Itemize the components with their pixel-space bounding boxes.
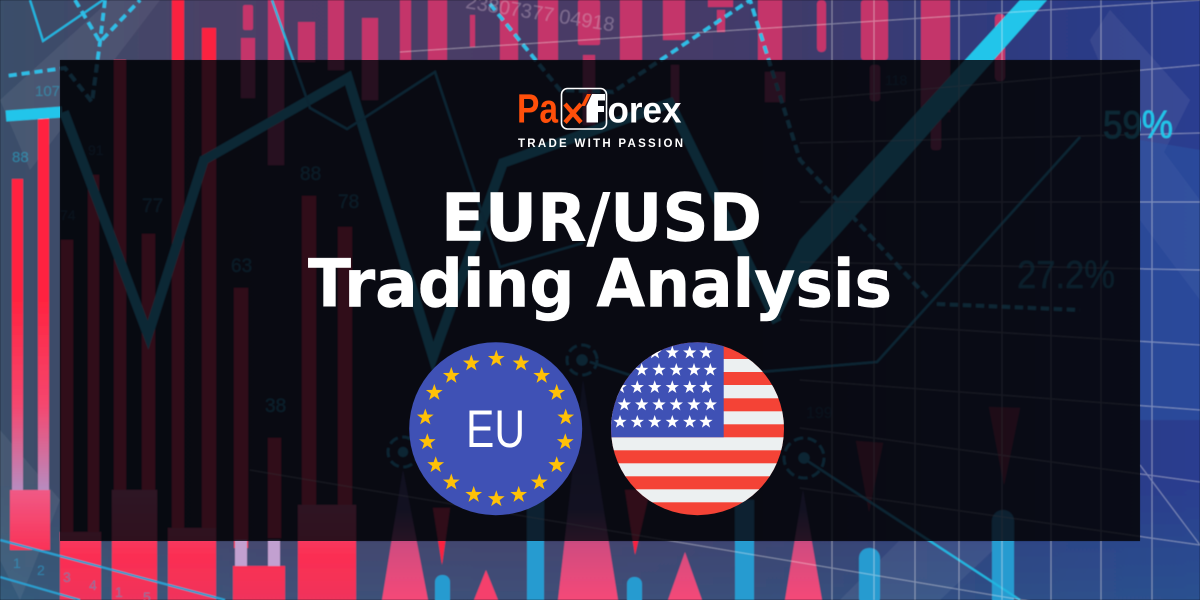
background: trading chart: 4 [89,577,97,593]
chart numbers: 118 [885,72,908,88]
chart numbers: 63 [231,256,252,277]
blue columns [435,500,1014,600]
thick rising line [64,78,777,357]
background: trading chart: 3 [63,569,71,585]
red bars [12,118,49,490]
logo wordmark: orex [608,90,682,130]
chart numbers: 77 [142,196,163,217]
background: trading chart: 1 [115,584,123,600]
logo wordmark [517,86,682,132]
chart numbers: 27.2% [1017,254,1115,297]
grid lines [250,0,1200,600]
chart numbers: 91 [88,142,104,158]
background: trading chart: 2 [37,562,45,578]
chart numbers: 88 [12,149,29,166]
chart numbers: 78 [338,192,359,213]
pink spires [382,380,822,600]
chart numbers: 59% [1103,104,1173,147]
chart numbers: 88 [300,164,321,185]
icon: EU flag [409,342,582,515]
title: Trading Analysis [308,246,892,322]
pink blocks at the bottom [10,490,356,600]
logo wordmark: Pa [517,86,559,132]
dashed lines [6,0,1080,310]
chart numbers: 107 [35,83,60,100]
ruler at the bottom-left [0,540,225,600]
chart numbers: 74 [60,207,76,223]
background: trading chart: 1 [13,555,21,571]
panel: dark overlay [60,60,1140,541]
logo: PaxForex [517,86,683,150]
title [308,180,892,322]
target circles [398,354,810,464]
chart numbers [12,72,1173,422]
icon: US flag [605,340,790,516]
chart numbers: 199 [806,405,833,422]
chart numbers: 38 [265,396,286,417]
top candlesticks [241,0,1005,165]
logo tagline: TRADE WITH PASSION [518,138,683,150]
icon: EU flag: EU [466,400,525,459]
title: EUR/USD [441,180,762,256]
